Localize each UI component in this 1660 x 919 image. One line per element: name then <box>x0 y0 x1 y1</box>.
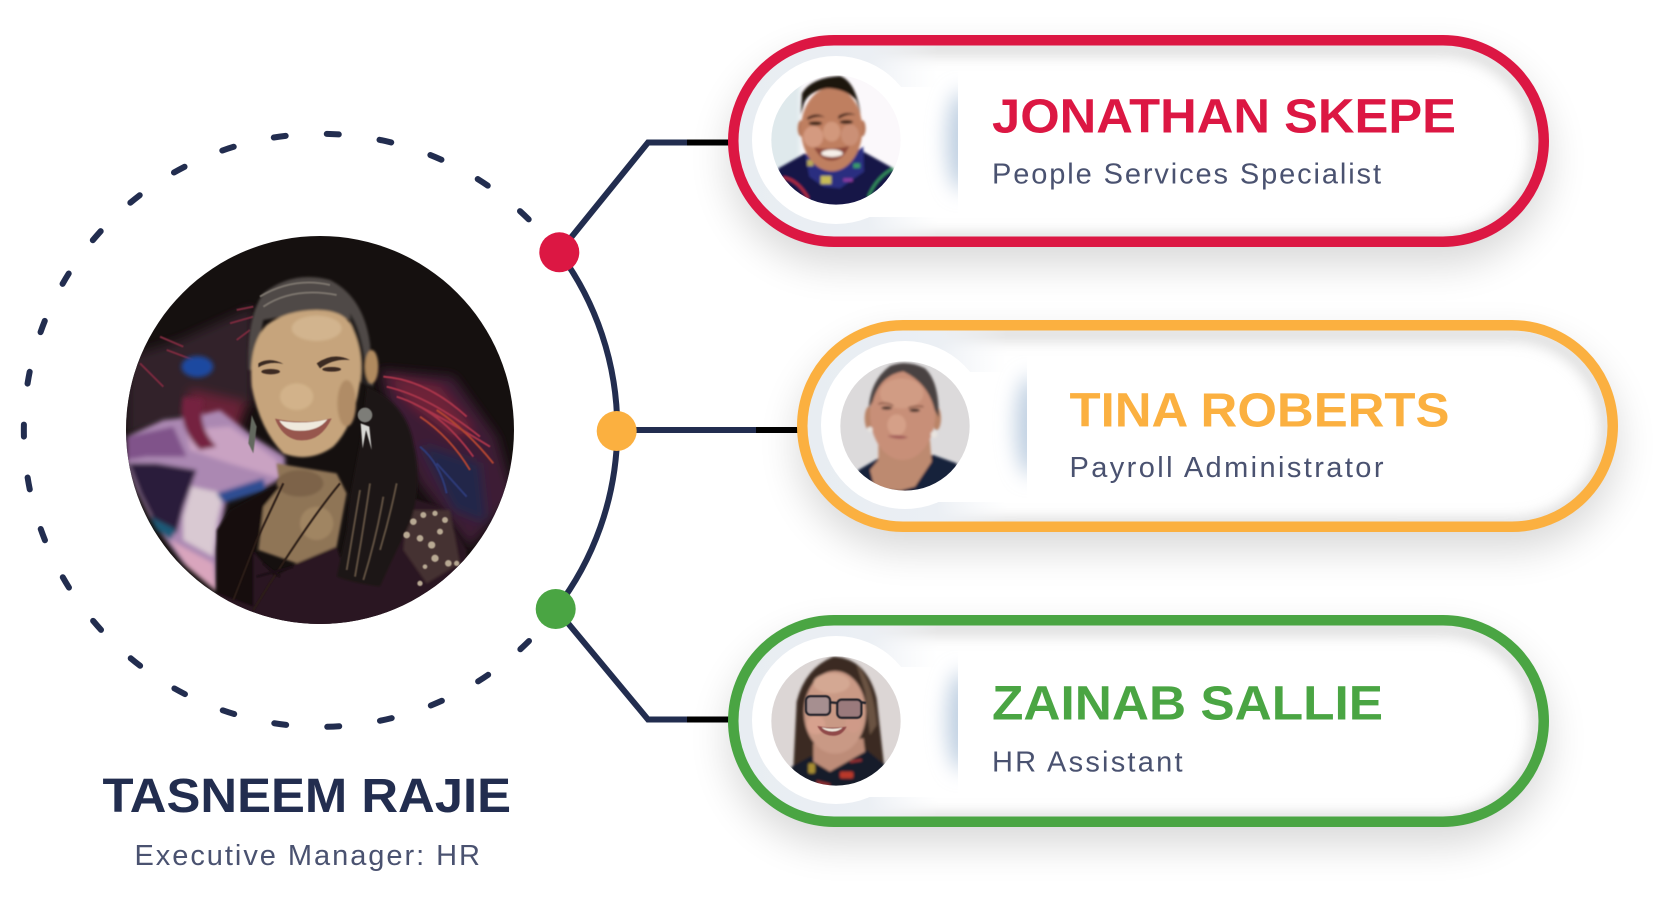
lace <box>403 511 459 586</box>
photo: Tasneem Rajie <box>126 236 514 624</box>
cardigan <box>214 488 278 596</box>
connector: red branch <box>565 142 730 245</box>
card: Tina Roberts <box>797 325 1618 550</box>
role: People Services Specialist: People Services Specialist <box>992 158 1381 190</box>
card: Jonathan Skepe <box>728 40 1549 265</box>
caption: central person name: TASNEEM RAJIE <box>102 770 511 823</box>
necklace <box>233 483 340 610</box>
hair top <box>248 277 373 387</box>
photo: Zainab Sallie <box>770 655 903 792</box>
skin of chest <box>258 463 347 563</box>
photo: Jonathan Skepe <box>771 75 895 205</box>
dress <box>216 499 468 624</box>
photo: Tina Roberts <box>837 360 973 497</box>
background paint streaks <box>140 307 493 497</box>
name: Zainab Sallie: ZAINAB SALLIE <box>992 678 1383 730</box>
connector: orange branch <box>616 427 798 433</box>
face <box>251 310 361 457</box>
node: orange dot <box>597 411 637 451</box>
connector: green branch <box>562 616 730 720</box>
glasses and smile <box>806 696 866 736</box>
earrings <box>358 408 372 422</box>
dashed orbit around central portrait <box>24 134 529 727</box>
name: Jonathan Skepe: JONATHAN SKEPE <box>992 90 1456 144</box>
card: Zainab Sallie <box>728 620 1549 845</box>
node: green dot <box>536 589 576 629</box>
role: Payroll Administrator: Payroll Administrator <box>1070 452 1384 484</box>
name: Tina Roberts: TINA ROBERTS <box>1070 384 1450 438</box>
connector arc <box>556 252 617 609</box>
ear <box>365 350 378 383</box>
node: red dot <box>539 232 579 272</box>
caption: central person role: Executive Manager: HR <box>134 840 480 872</box>
role: HR Assistant: HR Assistant <box>992 746 1182 778</box>
hair strands <box>347 483 397 580</box>
hair back right <box>337 387 418 587</box>
